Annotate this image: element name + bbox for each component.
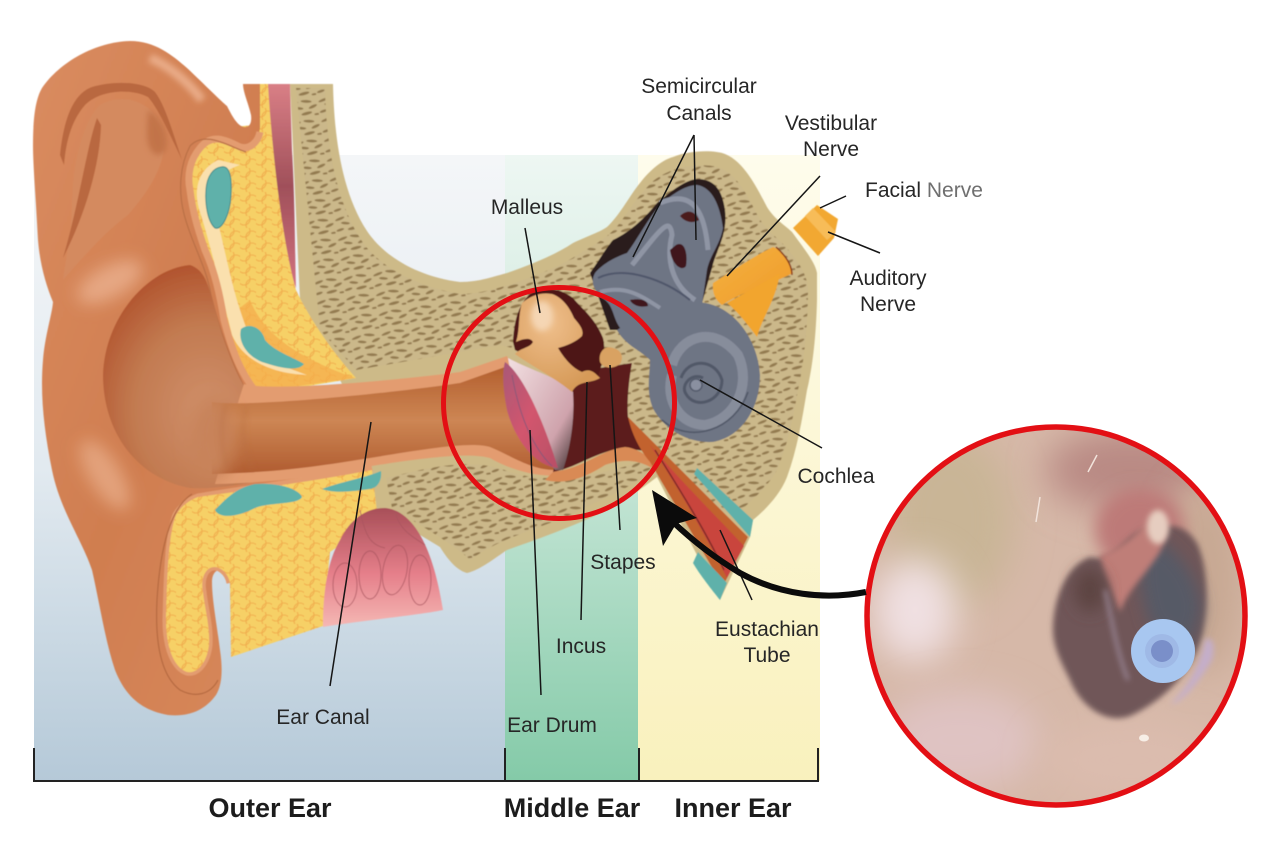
pinna: lower rim line [157, 494, 218, 694]
eustachian tube [628, 417, 753, 600]
pinna: lower antihelix highlight [70, 433, 140, 517]
label: Incus: Incus [556, 635, 606, 658]
spongy bone texture: upper [296, 88, 808, 515]
middle ear cavity [553, 363, 656, 472]
cartilage teal: middle [240, 326, 304, 368]
pinna: antihelix highlight [71, 251, 149, 313]
label: Stapes: Stapes [590, 551, 656, 574]
otoscope photo inset [860, 420, 1260, 820]
eardrum membrane [503, 358, 573, 470]
ossicles: malleus and incus [515, 293, 600, 392]
label: Vestibular Nerve: Vestibular [785, 112, 877, 135]
cochlea [617, 302, 760, 442]
pinna: top highlight [150, 58, 202, 100]
label: Malleus: Malleus [491, 196, 563, 219]
pinna: inner rim line [181, 139, 248, 394]
light skin band around lower tissue [166, 468, 372, 672]
heading: Middle Ear: Middle Ear [504, 793, 641, 823]
arrow from inset to middle ear [652, 490, 866, 596]
section brackets [34, 748, 818, 781]
muscle strip [266, 84, 296, 288]
ear anatomy illustration [33, 41, 838, 715]
pinna: fossa dark accent [147, 110, 167, 155]
ossicle dark space [513, 289, 604, 376]
ossicle: stapes [600, 347, 622, 368]
head tissue: upper skull bone and skin [290, 84, 817, 600]
cartilage teal: lower right [322, 471, 381, 492]
label: Cochlea: Cochlea [797, 465, 875, 488]
label: Eustachian Tube: Tube [743, 644, 791, 667]
spongy bone texture: inner lower [655, 420, 778, 512]
cartilage teal: lower left [215, 484, 302, 516]
nerve bundle [713, 205, 838, 337]
heading: Inner Ear: Inner Ear [674, 793, 792, 823]
lower orange rim of cavity [545, 447, 662, 482]
ear canal [212, 367, 555, 474]
ossicle highlight [531, 301, 553, 331]
pinna: fossa shading [63, 99, 164, 280]
pale cartilage streak [197, 160, 307, 375]
label: Facial Nerve: Facial Nerve [865, 179, 983, 202]
panel: inner ear background [638, 155, 820, 781]
gland [323, 508, 443, 627]
label: Semicircular Canals: Canals [666, 102, 732, 125]
label: Ear Canal: Ear Canal [276, 706, 370, 729]
fatty tissue: lower [166, 470, 378, 672]
red circle highlight: middle ear [444, 288, 674, 518]
label: Eustachian Tube: Eustachian [715, 618, 819, 641]
label: Auditory Nerve: Nerve [860, 293, 916, 316]
cartilage teal: upper [206, 167, 231, 228]
canal skin rim [215, 356, 560, 484]
concha [103, 265, 290, 488]
panel: middle ear background [505, 155, 638, 781]
label: Ear Drum: Ear Drum [507, 714, 597, 737]
panel: outer ear background [34, 155, 505, 781]
concha to canal blend [190, 396, 234, 480]
pinna: scapha crease [60, 83, 182, 165]
fatty tissue: upper [180, 84, 356, 396]
heading: Outer Ear: Outer Ear [208, 793, 332, 823]
label: Vestibular Nerve: Nerve [803, 138, 859, 161]
canal fold [222, 404, 252, 470]
pinna: outer ear shell [33, 41, 300, 715]
label: Semicircular Canals: Semicircular [641, 75, 757, 98]
light skin band around upper tissue [189, 132, 260, 392]
red circle border of inset [867, 427, 1245, 805]
pinna: fold crease [63, 118, 101, 258]
leader lines [330, 135, 880, 695]
label: Auditory Nerve: Auditory [849, 267, 927, 290]
semicircular canals [590, 179, 725, 336]
spongy bone texture: lower [386, 462, 655, 560]
fatty tissue tint: orange lower portion [218, 300, 355, 392]
